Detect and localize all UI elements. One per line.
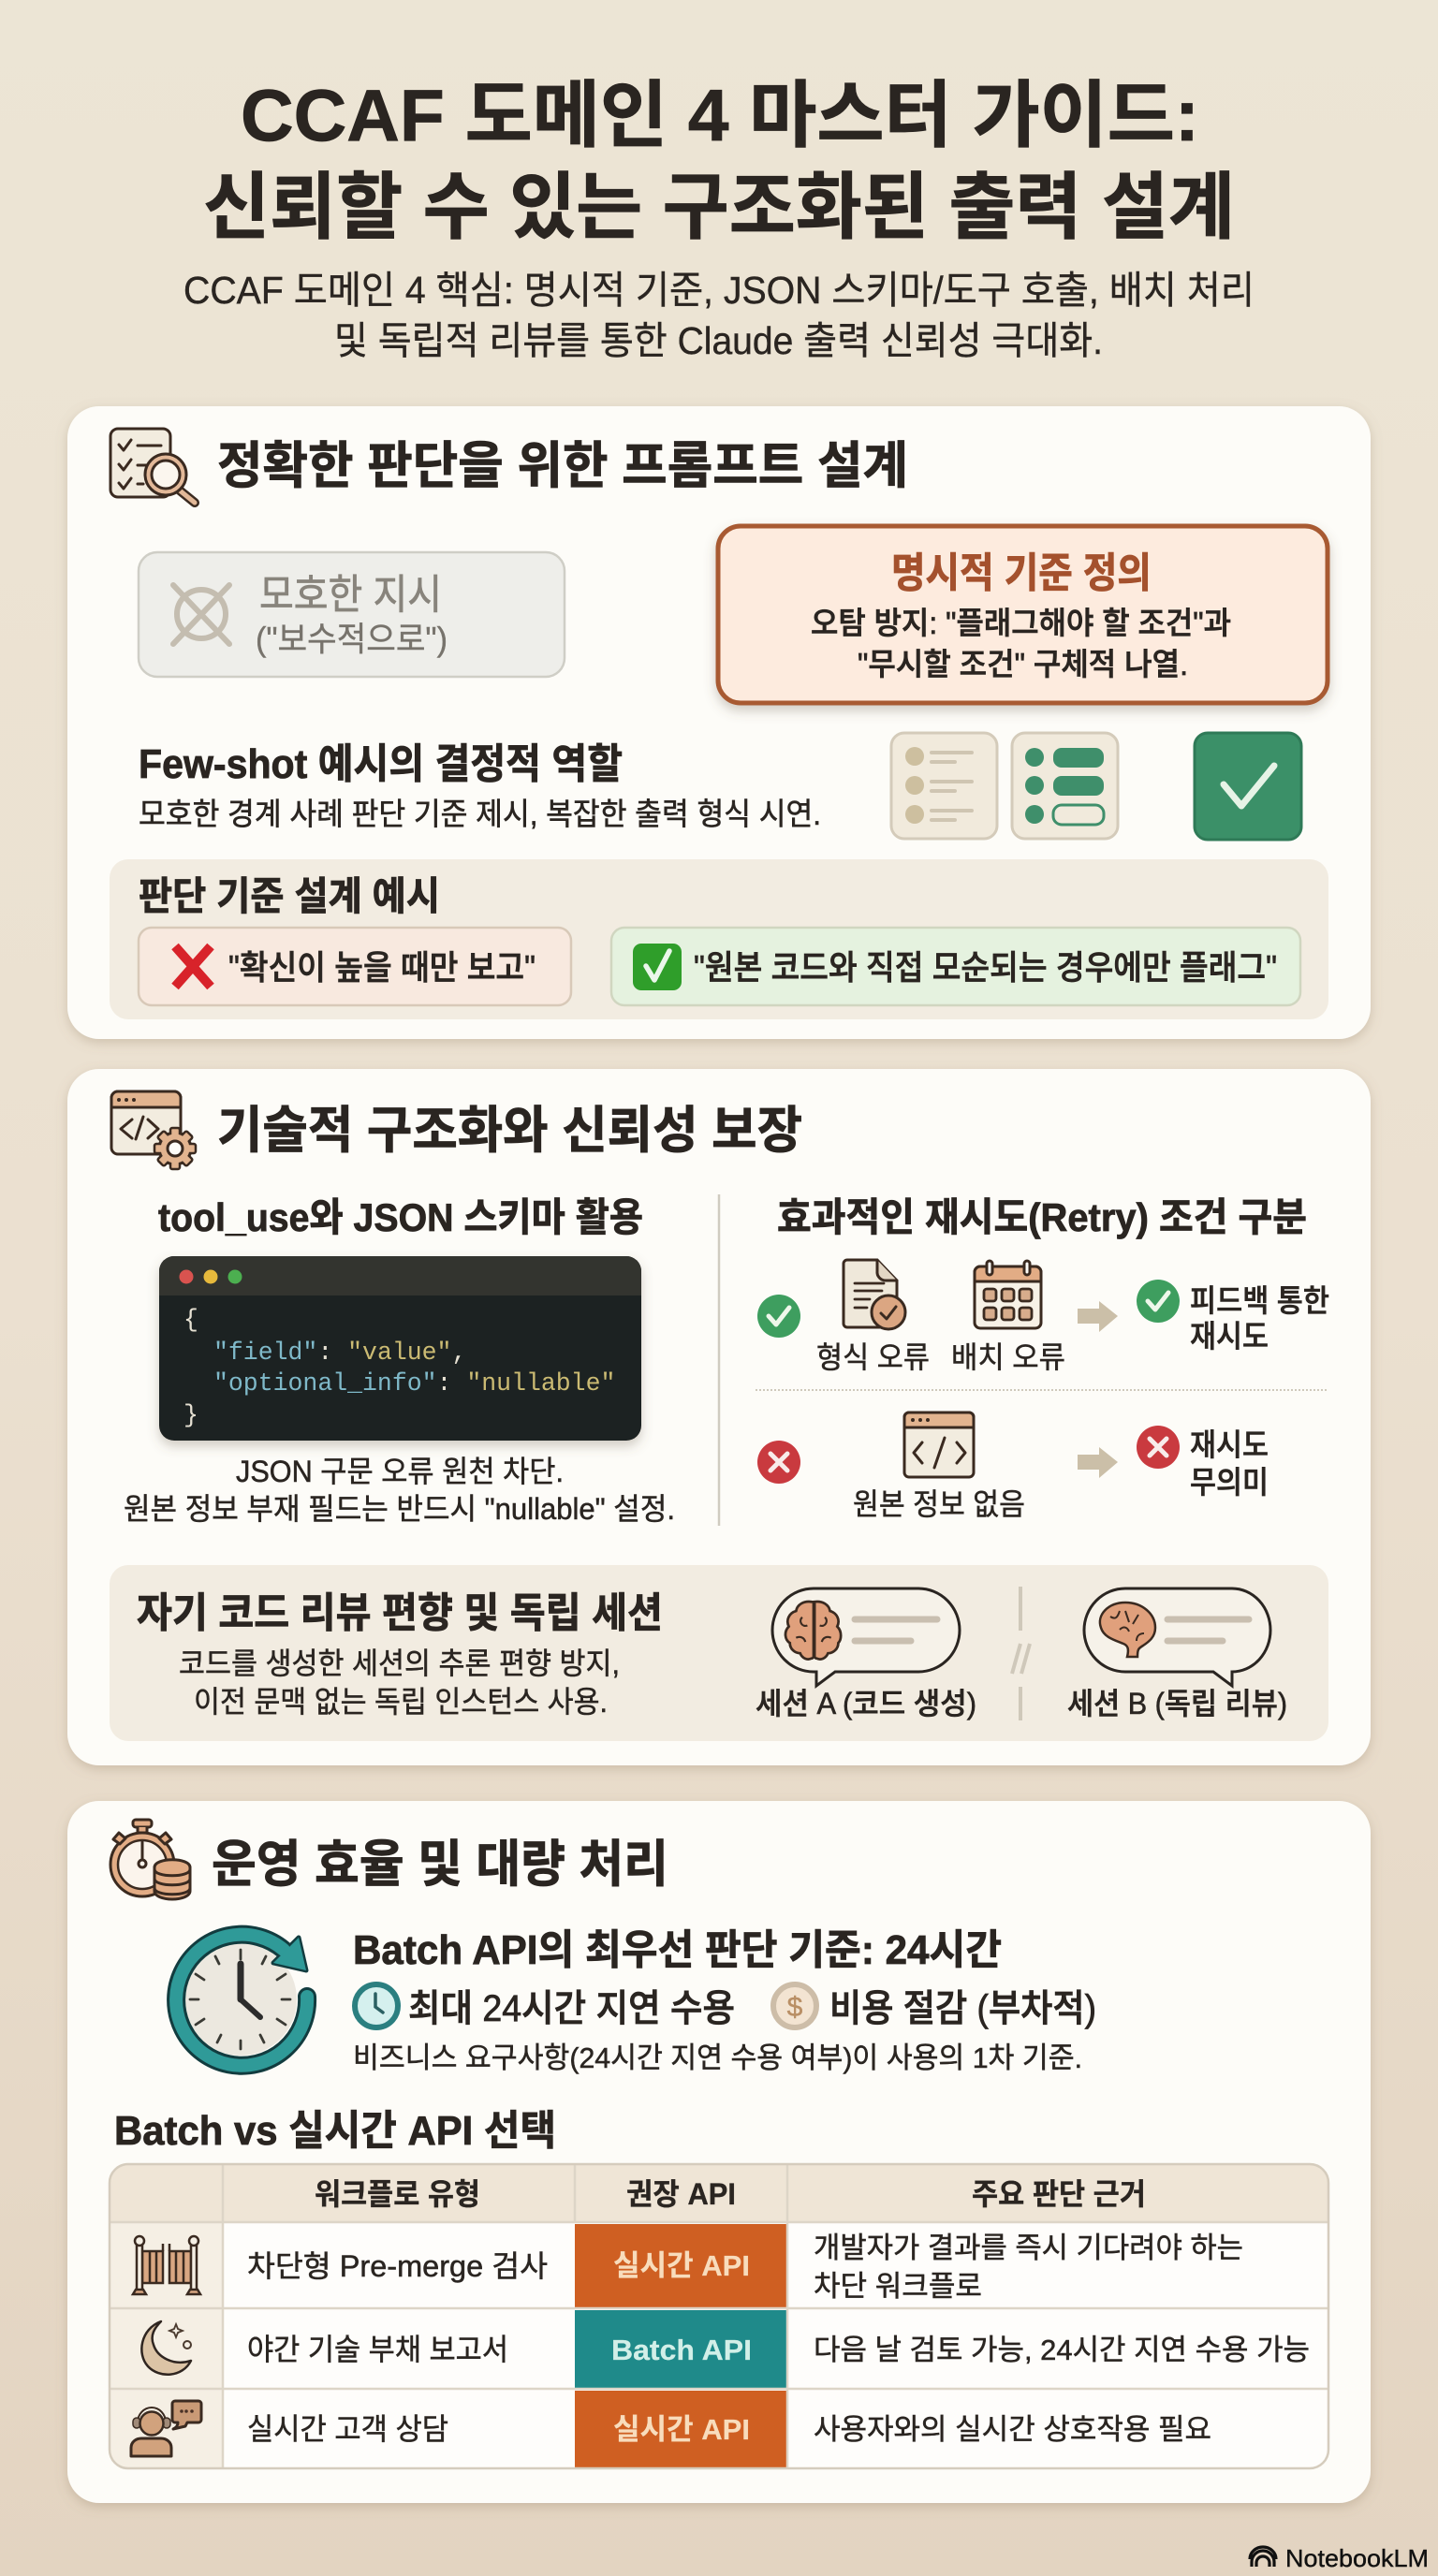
panel: operational efficiency: 최대 24시간 지연 수용 (408, 1988, 735, 2029)
card: vague instruction (139, 552, 565, 677)
subtitle (183, 269, 1255, 362)
icon: calendar (975, 1261, 1041, 1328)
retry row: valid: 피드백 통한 (1190, 1283, 1329, 1318)
retry row: valid: 배치 오류 (951, 1340, 1065, 1374)
card: vague instruction: ("보수적으로") (256, 620, 448, 658)
icon: structured list (1012, 733, 1118, 839)
panel: prompt design (67, 406, 1371, 1039)
icon: green check (1195, 733, 1301, 840)
heading: operational efficiency: 운영 효율 및 대량 처리 (212, 1837, 668, 1893)
retry row: futile: 원본 정보 없음 (853, 1487, 1025, 1521)
caption: JSON: JSON 구문 오류 원천 차단. (236, 1455, 564, 1488)
retry row: futile: 무의미 (1190, 1465, 1269, 1500)
panel: criteria design examples (110, 859, 1328, 1019)
heading: batch criteria: Batch API의 최우선 판단 기준: 24시간 (353, 1927, 1002, 1973)
icon: crossed circle (173, 585, 229, 644)
code window (159, 1256, 641, 1441)
table: batch vs realtime (110, 2164, 1328, 2468)
icon: dollar coin (773, 1984, 816, 2027)
icon: stopwatch with database (110, 1820, 190, 1899)
row: nightly tech debt report (141, 2321, 1310, 2375)
heading: retry: 효과적인 재시도(Retry) 조건 구분 (777, 1195, 1307, 1239)
card: vague instruction: 모호한 지시 (259, 572, 442, 618)
code window: } (183, 1401, 198, 1429)
title: CCAF 도메인 4 마스터 가이드: (241, 74, 1199, 156)
icon: dollar coin: $ (787, 1992, 803, 2023)
subtitle: CCAF 도메인 4 핵심: 명시적 기준, JSON 스키마/도구 호출, 배치 처리 (183, 269, 1255, 312)
subtitle: 및 독립적 리뷰를 통한 Claude 출력 신뢰성 극대화. (334, 319, 1103, 362)
row: nightly tech debt report: 다음 날 검토 가능, 24시간 지연 수용 가능 (814, 2334, 1310, 2366)
heading: tool_use: tool_use와 JSON 스키마 활용 (158, 1195, 643, 1239)
panel: independent session review: 이전 문맥 없는 독립 인스턴스 사용. (194, 1685, 608, 1719)
icon: support agent (131, 2401, 201, 2456)
session divider (1012, 1587, 1030, 1720)
table header: 주요 판단 근거 (972, 2177, 1146, 2211)
panel: independent session review: 코드를 생성한 세션의 추론 편향 방지, (179, 1647, 620, 1680)
row: pre-merge check (133, 2232, 1243, 2303)
row: pre-merge check: 실시간 API (613, 2249, 750, 2282)
row: nightly tech debt report: Batch API (611, 2334, 752, 2366)
panel: independent session review (110, 1565, 1328, 1741)
arrow (1078, 1301, 1118, 1332)
code window: "field": "value", (213, 1339, 466, 1367)
icon: moon (141, 2321, 191, 2375)
icon: small clock (355, 1984, 398, 2027)
few-shot text: 모호한 경계 사례 판단 기준 제시, 복잡한 출력 형식 시연. (139, 797, 821, 831)
row: nightly tech debt report: 야간 기술 부채 보고서 (247, 2333, 508, 2366)
panel: independent session review: 자기 코드 리뷰 편향 및 독립 세션 (137, 1590, 663, 1636)
table header: 권장 API (626, 2177, 736, 2211)
heading: batch vs realtime: Batch vs 실시간 API 선택 (114, 2108, 556, 2154)
good example: "원본 코드와 직접 모순되는 경우에만 플래그" (694, 948, 1277, 987)
icon: checklist with magnifier (110, 429, 195, 503)
icon: brain front (785, 1602, 841, 1660)
row: live customer support (131, 2401, 1211, 2456)
retry row: futile: 재시도 (1190, 1427, 1269, 1462)
row: pre-merge check: 개발자가 결과를 즉시 기다려야 하는 (814, 2232, 1243, 2264)
session A bubble: 세션 A (코드 생성) (756, 1687, 976, 1720)
card: explicit criteria: 명시적 기준 정의 (891, 550, 1152, 596)
arrow (1078, 1447, 1118, 1478)
few-shot text (139, 741, 821, 831)
session B bubble: 세션 B (독립 리뷰) (1067, 1687, 1287, 1720)
table header (315, 2177, 1146, 2211)
panel: operational efficiency (67, 1801, 1371, 2503)
panel: operational efficiency: 비용 절감 (부차적) (829, 1988, 1096, 2029)
code window: { (183, 1306, 198, 1334)
card: explicit criteria: "무시할 조건" 구체적 나열. (858, 647, 1188, 681)
retry row: valid: 재시도 (1190, 1319, 1269, 1354)
heading: prompt design: 정확한 판단을 위한 프롬프트 설계 (217, 438, 908, 494)
watermark: NotebookLM: NotebookLM (1285, 2544, 1429, 2572)
code window: "optional_info": "nullable" (213, 1369, 615, 1398)
heading: technical structuring: 기술적 구조화와 신뢰성 보장 (217, 1103, 802, 1159)
bad example (139, 928, 571, 1005)
title (203, 74, 1235, 248)
row: live customer support: 실시간 API (613, 2413, 750, 2446)
few-shot text: Few-shot 예시의 결정적 역할 (139, 741, 623, 787)
good example (611, 928, 1300, 1005)
session B bubble (1067, 1588, 1287, 1720)
icon: code window with gear (111, 1091, 196, 1169)
icon: code document (904, 1412, 974, 1477)
caption: JSON: 원본 정보 부재 필드는 반드시 "nullable" 설정. (124, 1492, 675, 1526)
title: 신뢰할 수 있는 구조화된 출력 설계 (203, 166, 1235, 248)
icon: plain list (891, 733, 997, 839)
session A bubble (756, 1588, 976, 1720)
panel: criteria design examples: 판단 기준 설계 예시 (139, 874, 440, 918)
icon: document check (844, 1260, 905, 1329)
panel: operational efficiency: 비즈니스 요구사항(24시간 지연 수용 여부)이 사용의 1차 기준. (353, 2042, 1082, 2074)
caption: JSON (124, 1455, 675, 1526)
icon: brain side (1100, 1603, 1155, 1657)
retry row: futile (757, 1412, 1269, 1521)
card: explicit criteria (718, 526, 1328, 703)
panel: technical structuring (67, 1069, 1371, 1765)
row: pre-merge check: 차단 워크플로 (814, 2270, 982, 2303)
icon: clock with arrow (176, 1935, 307, 2066)
table header: 워크플로 유형 (315, 2177, 480, 2211)
icon: gate (133, 2236, 200, 2294)
row: live customer support: 사용자와의 실시간 상호작용 필요 (814, 2413, 1211, 2446)
row: live customer support: 실시간 고객 상담 (247, 2412, 448, 2446)
retry row: valid (757, 1260, 1329, 1374)
card: explicit criteria: 오탐 방지: "플래그해야 할 조건"과 (811, 606, 1231, 640)
bad example: "확신이 높을 때만 보고" (228, 948, 536, 987)
retry row: valid: 형식 오류 (816, 1340, 930, 1374)
row: pre-merge check: 차단형 Pre-merge 검사 (247, 2249, 548, 2283)
